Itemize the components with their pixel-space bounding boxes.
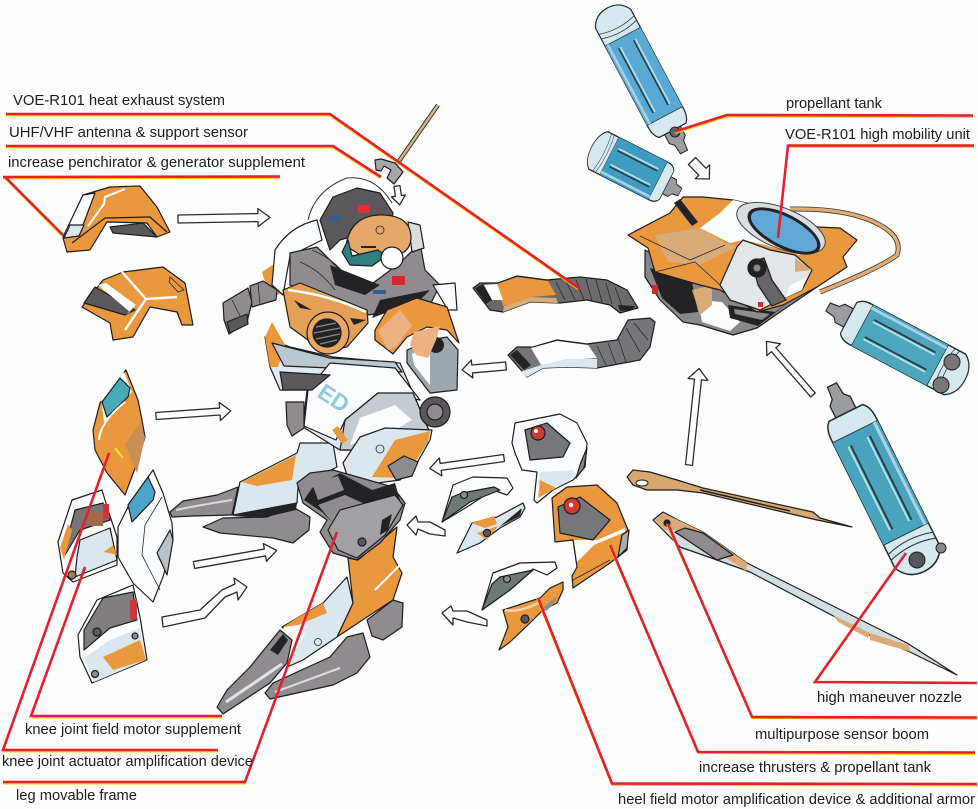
tank: right propellant: [817, 287, 976, 400]
underside machinery: [645, 250, 817, 335]
part: heel piece white 1: [442, 477, 513, 522]
label: high maneuver nozzle: high maneuver nozzle: [817, 690, 962, 706]
back leg: [170, 443, 337, 543]
arrow: hose to torso: [461, 357, 507, 379]
part: knee field upper: [512, 414, 587, 503]
tank: upper propellant: [590, 0, 702, 161]
neck and shoulder collar: [272, 220, 457, 318]
panel: robot body: [170, 178, 459, 714]
label: heel field motor: heel field motor amplification device & additional armor: [618, 792, 975, 808]
arrow: curved heel: [442, 606, 487, 626]
label: knee actuator: knee joint actuator amplification device: [2, 754, 253, 770]
part: shoulder armor lower: [82, 267, 193, 340]
label: knee field motor: knee joint field motor supplement: [25, 722, 241, 738]
chest block with vent: [283, 283, 368, 354]
part: shoulder armor upper: [63, 186, 170, 252]
part: heat exhaust hose white: [508, 318, 655, 377]
sensor hinge: [640, 199, 786, 307]
part: heel armor orange: [499, 582, 563, 650]
top plate: [628, 197, 857, 312]
label: increase thrusters: increase thrusters & propellant tank: [699, 760, 932, 776]
arrow: shield to leg: [155, 402, 231, 425]
label: propellant tank: propellant tank: [786, 96, 883, 112]
arrow: curved lower left: [162, 578, 247, 627]
part: leg shield orange: [93, 370, 145, 495]
arrows: [155, 154, 820, 627]
label: heat exhaust: VOE-R101 heat exhaust system: [13, 93, 225, 109]
part: increase thrusters tank: [552, 485, 629, 588]
part: knee mech lower: [78, 585, 147, 683]
part: knee mech upper: [58, 490, 117, 582]
window: [730, 192, 832, 264]
arrow: top tank to unit: [685, 154, 717, 186]
arm and fist: [223, 262, 284, 334]
sensor boom upper: [627, 470, 852, 527]
arrow: antenna down: [390, 185, 407, 206]
label: penchirator: increase penchirator & generator supplement: [8, 155, 305, 171]
front leg: [282, 527, 403, 667]
lower torso: [265, 322, 430, 450]
tank: lower propellant with nozzle: [810, 374, 947, 582]
arrow: tank to unit: [760, 336, 820, 401]
part: heel piece white 2: [457, 503, 525, 553]
arrow: to shoulder armor: [178, 208, 270, 228]
front feet: [217, 630, 370, 714]
part: heel piece white 3: [482, 562, 557, 610]
tank: left propellant: [582, 128, 690, 211]
label: high mobility unit: VOE-R101 high mobility unit: [785, 127, 970, 143]
arrow: boom up: [679, 367, 709, 466]
shoulder armor: [375, 298, 459, 427]
label: sensor boom: multipurpose sensor boom: [755, 727, 929, 743]
panel: high mobility unit: [628, 192, 898, 335]
text: ED mark on torso: ED: [313, 378, 354, 418]
part: heat exhaust hose orange: [473, 276, 638, 313]
label: leg movable frame: leg movable frame: [16, 788, 137, 804]
sensor boom lower: [653, 512, 957, 675]
thigh: [343, 428, 432, 483]
part: leg shield white: [118, 470, 173, 602]
head: [308, 178, 411, 269]
arrow: knee piece to thigh: [428, 449, 505, 477]
strap: [790, 209, 898, 292]
antenna and clamp: [375, 105, 438, 184]
arrow: curved to knee: [407, 516, 445, 536]
label: antenna: UHF/VHF antenna & support sensor: [9, 125, 248, 141]
knee joint: [297, 470, 405, 560]
arrow: white shield to leg: [192, 542, 278, 574]
